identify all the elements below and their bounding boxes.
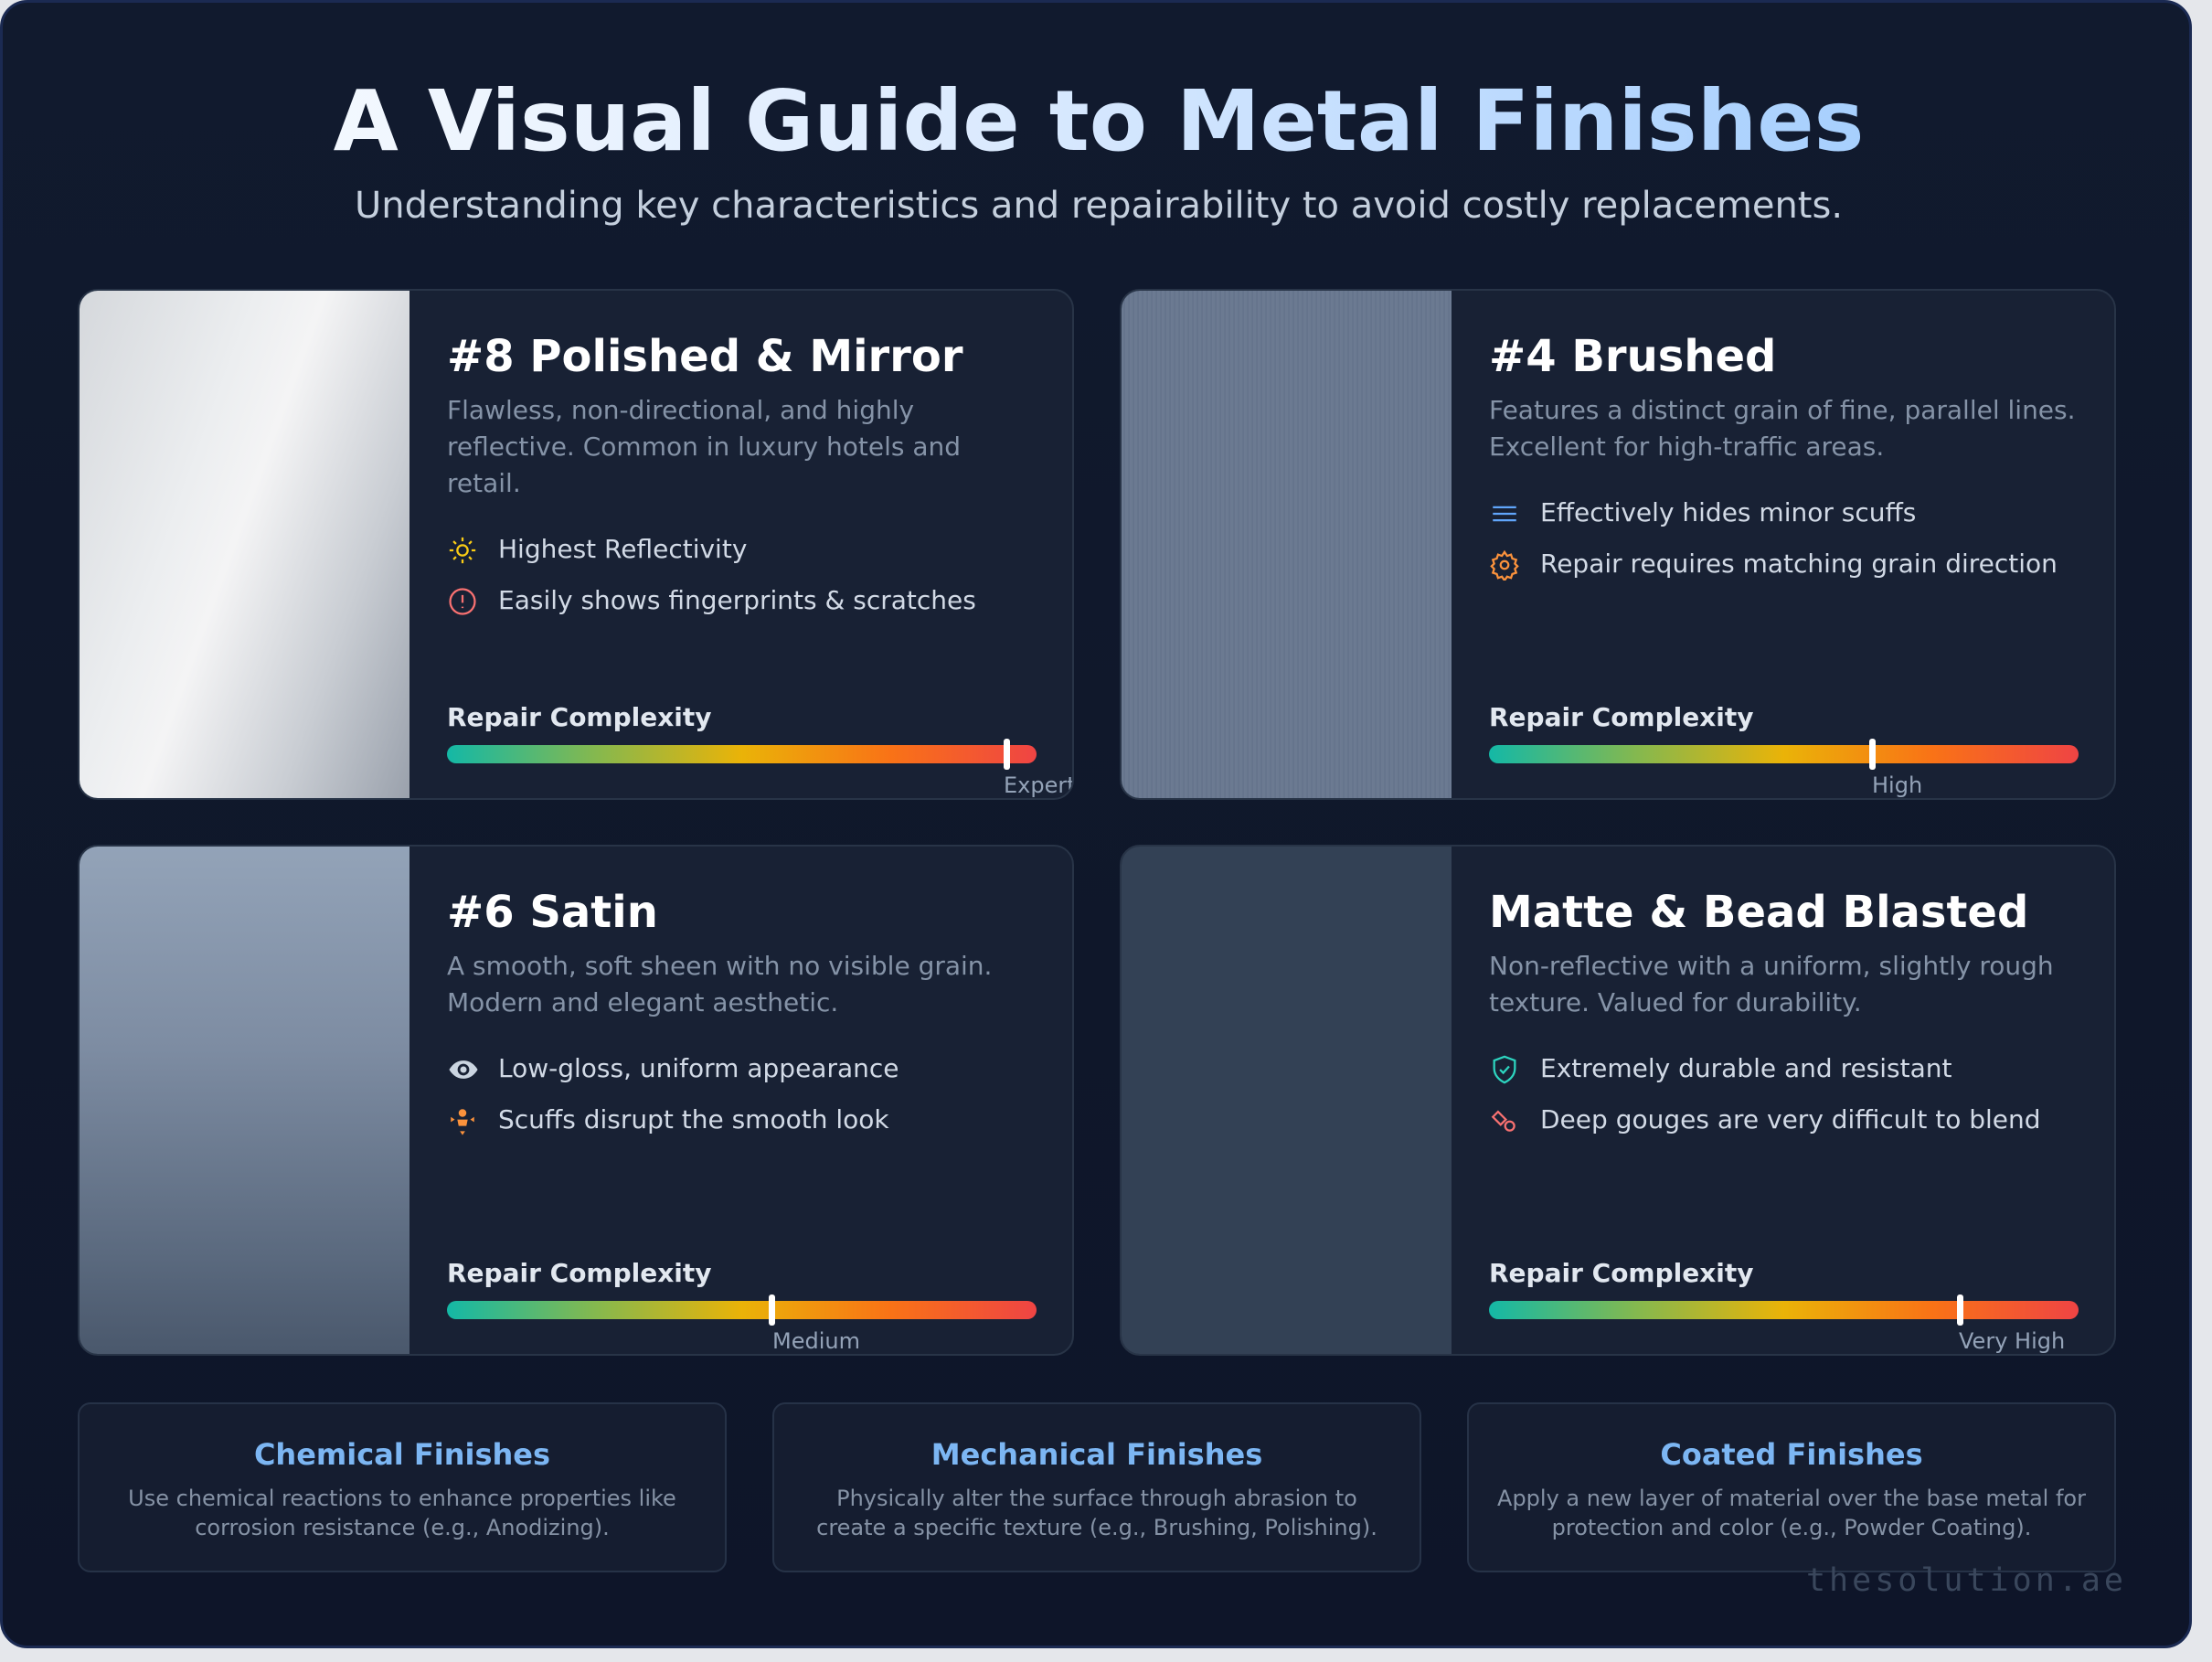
swatch: polished [80,291,409,798]
description: A smooth, soft sheen with no visible grain. Modern and elegant aesthetic. [447,951,992,1017]
label: repair complexity: Repair Complexity [1489,1258,1754,1288]
title: A Visual Guide to Metal Finishes [334,72,1864,170]
bullet: grain direction: Repair requires matching grain direction [1540,549,2058,579]
panel: brushed [1120,289,2116,800]
box: chemical [78,1402,727,1572]
description: Flawless, non-directional, and highly reflective. Common in luxury hotels and retail. [447,395,961,498]
box: chemical: Use chemical reactions to enhance properties like corrosion resistance (e.g., Anodizing). [128,1486,676,1540]
heading: #4 Brushed [1489,331,1776,382]
bullet: gouges: Deep gouges are very difficult to blend [1540,1104,2041,1135]
label: repair complexity: Repair Complexity [1489,702,1754,732]
watermark: thesolution.ae [1806,1562,2127,1599]
heading: #6 Satin [447,887,658,938]
swatch: satin [80,847,409,1354]
bullet: low gloss: Low-gloss, uniform appearance [498,1053,899,1083]
heading: #8 Polished & Mirror [447,331,963,382]
bar: complexity [447,1301,1037,1319]
description: Features a distinct grain of fine, parallel lines. Excellent for high-traffic areas. [1489,395,2076,462]
bullet: hides scuffs: Effectively hides minor scuffs [1540,497,1916,527]
label: repair complexity: Repair Complexity [447,1258,712,1288]
description: Non-reflective with a uniform, slightly rough texture. Valued for durability. [1489,951,2054,1017]
title [3,67,2195,176]
bullet: scuffs: Scuffs disrupt the smooth look [498,1104,889,1135]
panel: satin [78,845,1074,1356]
bar: complexity [1489,745,2079,763]
level label: Very High [1959,1328,2065,1354]
swatch: brushed [1122,291,1452,798]
box: coated: Coated Finishes [1660,1437,1923,1472]
panel: matte [1120,845,2116,1356]
swatch: matte [1122,847,1452,1354]
box: mechanical [772,1402,1421,1572]
bullet: reflectivity: Highest Reflectivity [498,534,747,564]
heading: Matte & Bead Blasted [1489,887,2028,938]
bullet: fingerprints: Easily shows fingerprints & scratches [498,585,976,615]
panel: polished [78,289,1074,800]
level label: Expert [1004,772,1074,798]
box: coated: Apply a new layer of material over the base metal for protection and color (e.g., Powder Coating). [1497,1486,2086,1540]
box: coated [1467,1402,2116,1572]
bar: complexity [447,745,1037,763]
box: chemical: Chemical Finishes [254,1437,550,1472]
bullet: durable: Extremely durable and resistant [1540,1053,1952,1083]
subtitle: Understanding key characteristics and repairability to avoid costly replacements. [355,185,1843,227]
bar: complexity [1489,1301,2079,1319]
box: mechanical: Mechanical Finishes [931,1437,1262,1472]
label: repair complexity: Repair Complexity [447,702,712,732]
level label: High [1872,772,1922,798]
level label: Medium [772,1328,860,1354]
box: mechanical: Physically alter the surface through abrasion to create a specific texture (e.g., Brushing, Polishing). [816,1486,1377,1540]
